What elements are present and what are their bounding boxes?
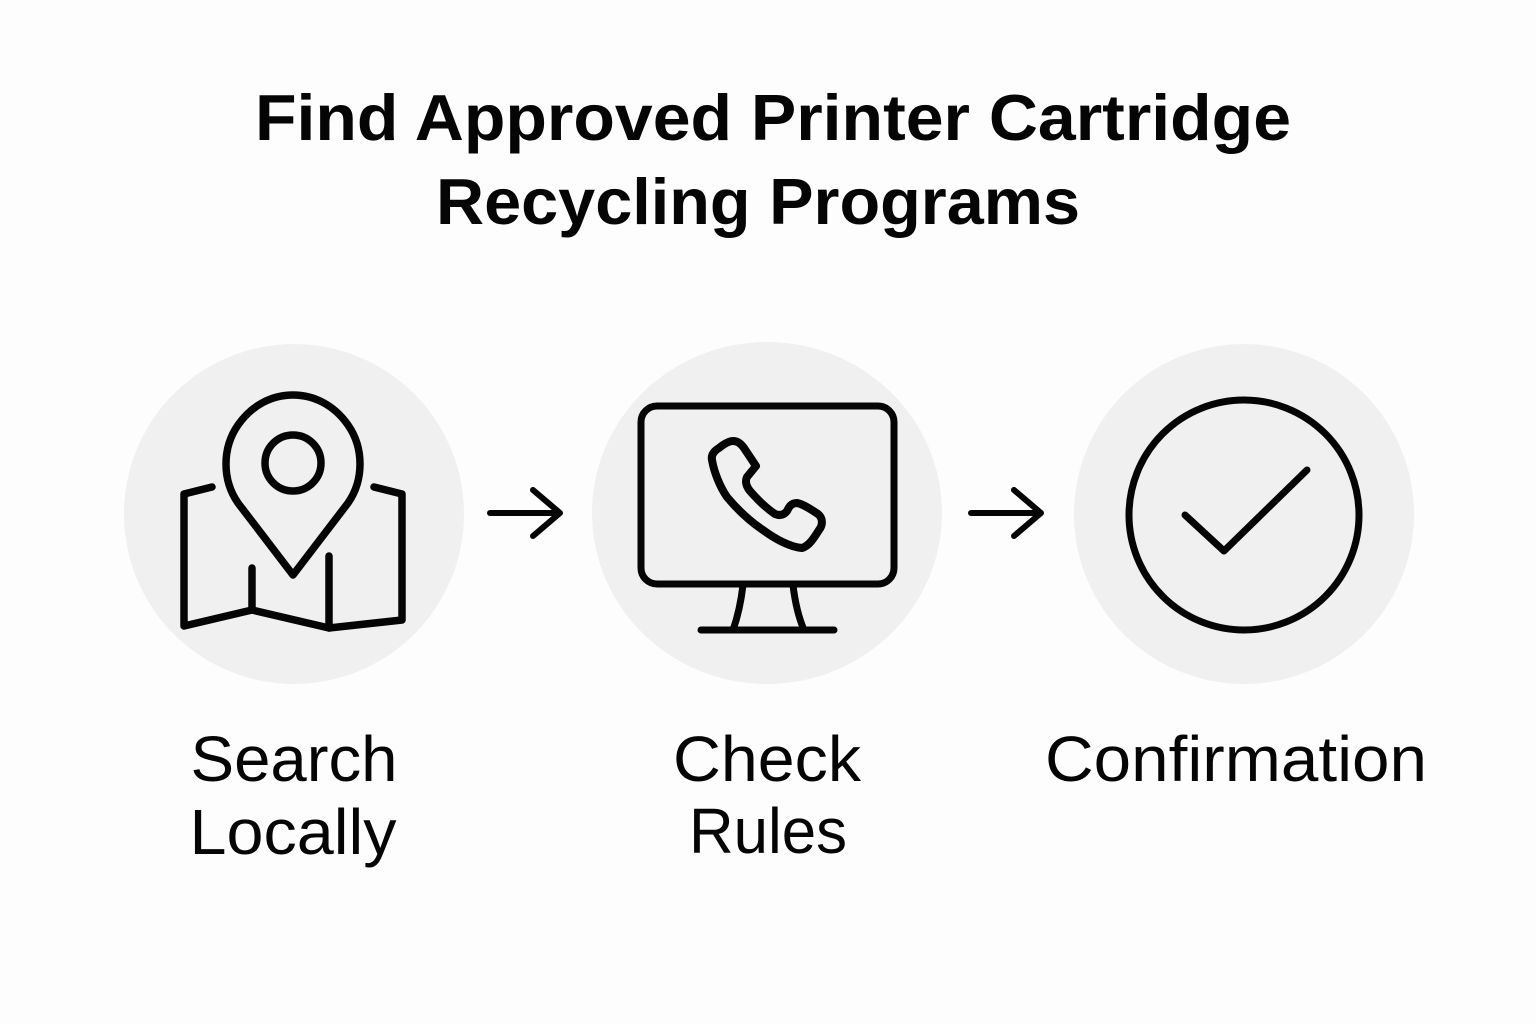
label: Check Rules: Rules: [689, 795, 847, 867]
label: Check Rules: [673, 723, 862, 867]
title: Find Approved Printer Cartridge: [255, 81, 1291, 154]
label: Search Locally: [190, 723, 398, 868]
label: Search Locally: Search: [190, 723, 398, 795]
label: Search Locally: Locally: [190, 796, 396, 868]
circle background 2: [592, 342, 942, 684]
title: Recycling Programs: [436, 165, 1080, 238]
label: Confirmation: Confirmation: [1045, 723, 1427, 795]
arrow 1: [490, 490, 560, 536]
step 1: search locally: [124, 344, 464, 868]
step 2: check rules: [592, 342, 942, 867]
label: Check Rules: Check: [673, 723, 862, 795]
icon: check mark in circle: [1129, 400, 1359, 630]
circle background 1: [124, 344, 464, 684]
circle background 3: [1074, 344, 1414, 684]
title: [255, 81, 1291, 238]
icon: map with location pin: [184, 395, 402, 628]
icon: monitor with phone: [641, 406, 894, 630]
arrow 2: [971, 490, 1041, 536]
step 3: confirmation: [1045, 344, 1427, 795]
